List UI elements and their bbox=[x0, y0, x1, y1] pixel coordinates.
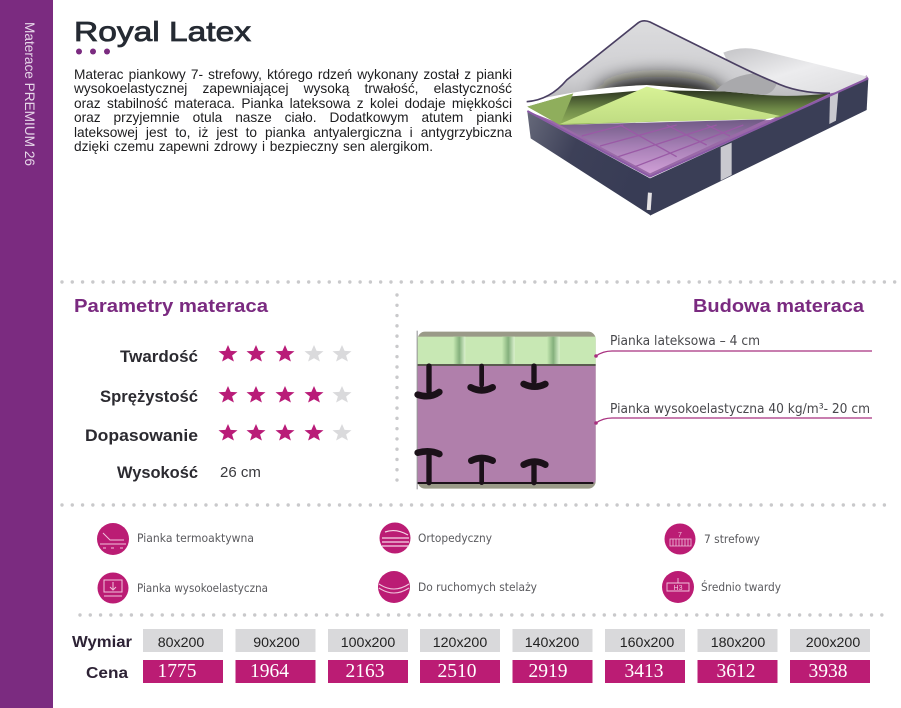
price cells: 2510 bbox=[438, 661, 476, 682]
feature: 7 strefowy: 7 strefowy bbox=[704, 532, 760, 546]
size cells: 180x200 bbox=[711, 635, 765, 651]
illustration: mattress with layers bbox=[527, 21, 868, 216]
parameter: Wysokość: Wysokość bbox=[117, 464, 198, 482]
price cells: 1775 bbox=[158, 661, 196, 682]
feature: 7 strefowy: 7 bbox=[678, 532, 682, 539]
label: high-elastic foam layer: Pianka wysokoelastyczna 40 kg/m³- 20 cm bbox=[610, 402, 870, 417]
title bbox=[74, 16, 251, 54]
feature: Ortopedyczny: Ortopedyczny bbox=[418, 531, 492, 545]
description text: oraz stabilność materaca. Pianka lateksowa z kolei dodaje miękkości bbox=[74, 96, 512, 111]
parameter: Dopasowanie bbox=[85, 424, 352, 445]
parameter: Twardość: Twardość bbox=[120, 348, 198, 366]
size cells: 160x200 bbox=[620, 635, 674, 651]
feature: Ortopedyczny bbox=[380, 522, 492, 554]
size cells: 80x200 bbox=[158, 635, 204, 651]
parameter: Dopasowanie: Dopasowanie bbox=[85, 427, 198, 445]
description text: lateksowej jest to, iż jest to pianka antyalergiczna i antygrzybiczna bbox=[74, 125, 512, 140]
description text: wysokoelastycznej zapewniającej wysoką trwałość, elastyczność bbox=[74, 81, 512, 96]
size cells bbox=[143, 629, 870, 652]
feature: 7 strefowy bbox=[664, 524, 760, 554]
title: Royal Latex bbox=[74, 16, 251, 47]
row label: Cena: Cena bbox=[86, 665, 128, 682]
price cells: 3413 bbox=[624, 661, 664, 682]
sidebar bbox=[0, 0, 53, 708]
size cells: 200x200 bbox=[806, 635, 860, 651]
description text: dzięki czemu zapewni zdrowy i bezpieczny sen alergikom. bbox=[74, 139, 433, 154]
heading: Parametry materaca: Parametry materaca bbox=[74, 295, 269, 316]
price cells bbox=[143, 660, 870, 683]
description text bbox=[74, 67, 512, 154]
price cells: 3612 bbox=[716, 661, 756, 682]
price cells: 2919 bbox=[528, 661, 568, 682]
feature: Pianka termoaktywna: Pianka termoaktywna bbox=[137, 531, 254, 545]
divider dots bbox=[62, 503, 893, 507]
feature: Średnio twardy bbox=[662, 571, 781, 603]
cross-section of mattress bbox=[417, 331, 596, 489]
description text: oraz przyjemnie otula nasze ciało. Dodatkowym atutem pianki bbox=[74, 110, 512, 125]
price cells: 1964 bbox=[250, 661, 289, 682]
parameter: Twardość bbox=[120, 345, 352, 366]
parameter: Sprężystość: Sprężystość bbox=[100, 388, 198, 406]
feature: Do ruchomych stelaży bbox=[378, 571, 537, 603]
row label: Wymiar: Wymiar bbox=[72, 634, 132, 651]
feature: Średnio twardy: Średnio twardy bbox=[701, 579, 781, 594]
size cells: 120x200 bbox=[433, 635, 487, 651]
sidebar label: Materace PREMIUM 26 bbox=[22, 22, 38, 166]
feature: Pianka termoaktywna bbox=[97, 523, 254, 555]
divider dots bbox=[80, 613, 887, 617]
label: latex foam layer: Pianka lateksowa – 4 cm bbox=[610, 334, 760, 349]
feature: Średnio twardy: H3 bbox=[674, 585, 683, 592]
parameter: Wysokość bbox=[117, 464, 261, 482]
size cells: 90x200 bbox=[253, 635, 300, 651]
divider dots bbox=[62, 280, 900, 284]
feature: Pianka wysokoelastyczna bbox=[98, 572, 268, 604]
heading: Budowa materaca: Budowa materaca bbox=[693, 295, 865, 316]
price cells: 3938 bbox=[808, 661, 848, 682]
size cells: 100x200 bbox=[341, 635, 395, 651]
price cells: 2163 bbox=[346, 661, 384, 682]
feature: Do ruchomych stelaży: Do ruchomych stelaży bbox=[418, 580, 537, 594]
parameter: Sprężystość bbox=[100, 386, 352, 406]
size cells: 140x200 bbox=[525, 635, 579, 651]
label: latex foam layer bbox=[594, 334, 872, 358]
feature: Pianka wysokoelastyczna: Pianka wysokoelastyczna bbox=[137, 581, 268, 595]
description text: Materac piankowy 7- strefowy, którego rdzeń wykonany został z pianki bbox=[74, 67, 512, 82]
vertical divider dots bbox=[395, 295, 399, 488]
label: high-elastic foam layer bbox=[594, 402, 872, 425]
parameter: Wysokość: 26 cm bbox=[220, 464, 261, 481]
